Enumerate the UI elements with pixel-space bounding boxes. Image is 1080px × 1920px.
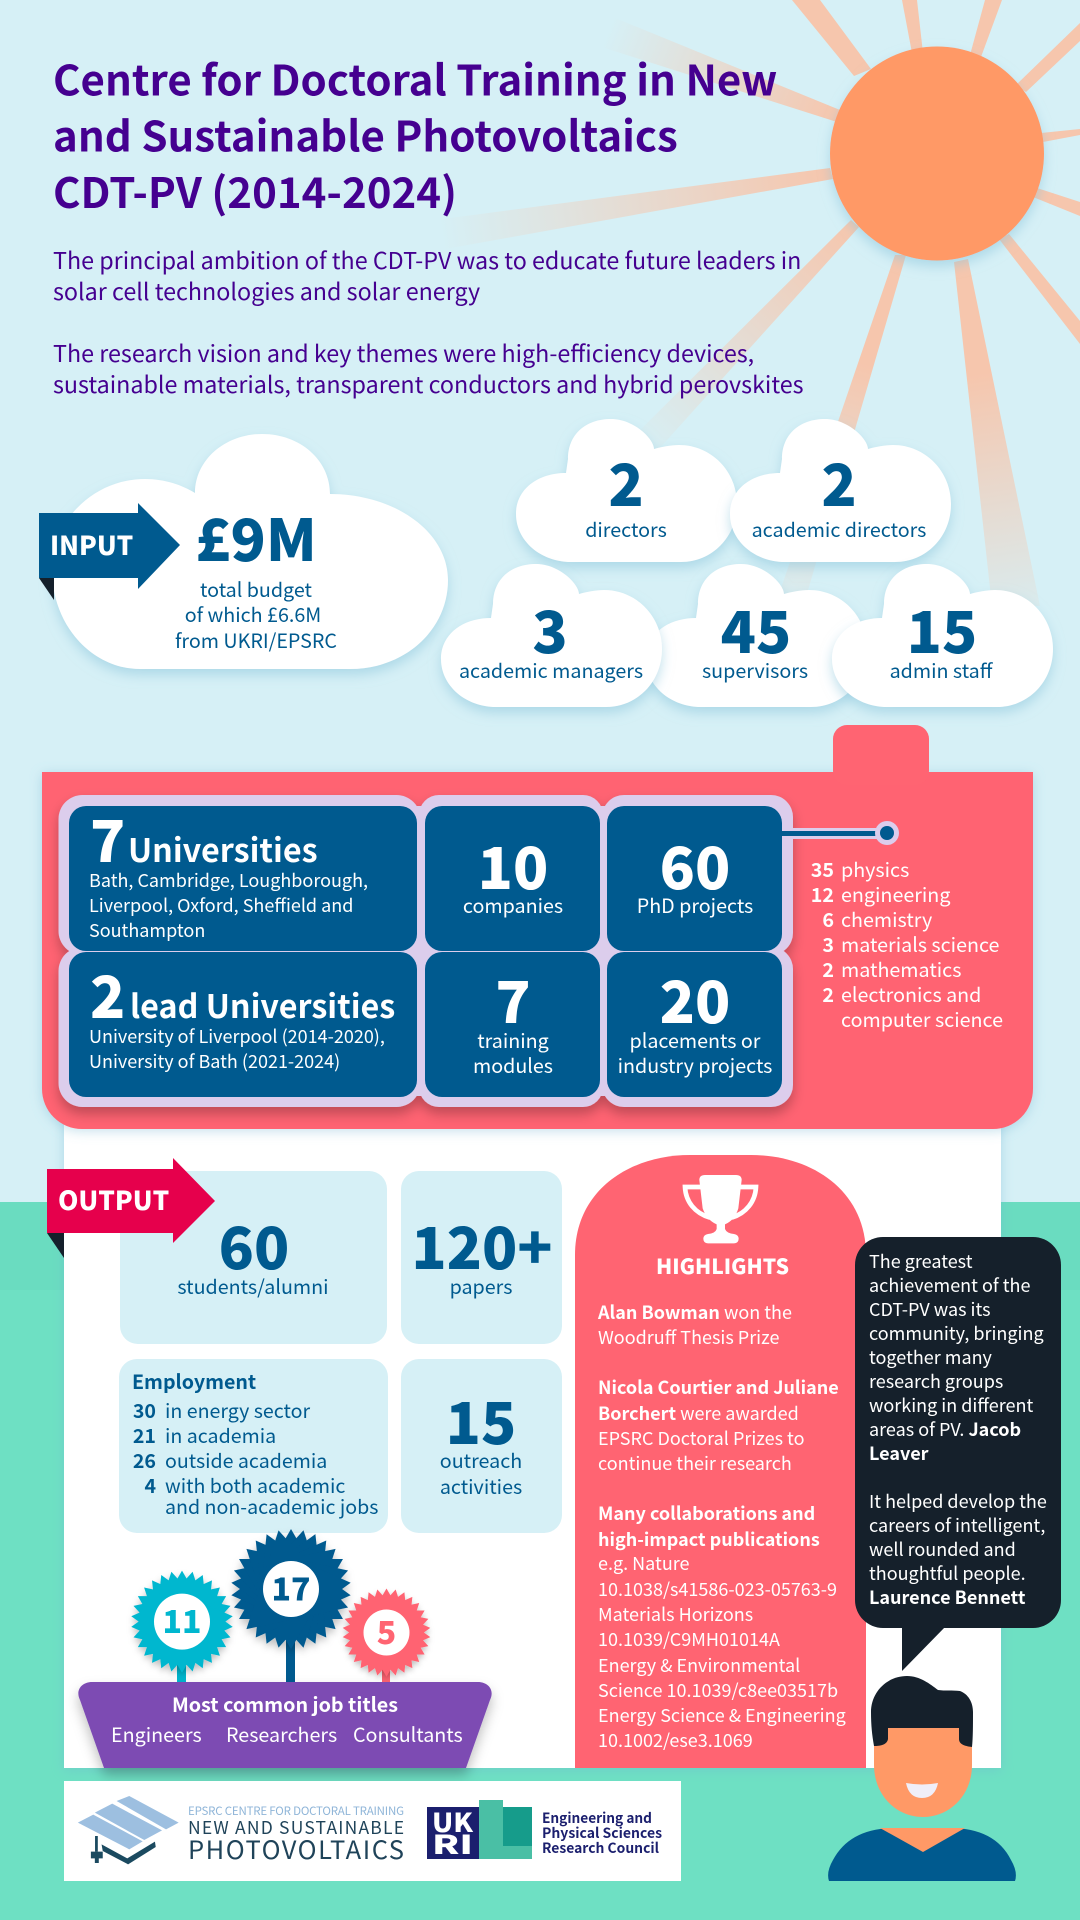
flower pot: job titles: Engineers (111, 1719, 202, 1748)
logo text: CDT-PV: PHOTOVOLTAICS (188, 1830, 404, 1867)
PhD subject list: 12 (811, 879, 834, 908)
panel: programme (42, 725, 1033, 1129)
panel: highlights: Materials Horizons (598, 1601, 753, 1627)
flower: 17 (231, 1510, 370, 1657)
speech bubble: achievement of the (869, 1272, 1030, 1298)
speech bubble: It helped develop the (869, 1488, 1047, 1514)
PhD subject list: 2 (822, 954, 834, 983)
logo panel (64, 1781, 681, 1881)
flower: 11: 11 (163, 1597, 201, 1643)
background sky (0, 0, 1080, 1202)
speech bubble (855, 1237, 1061, 1671)
cloud: academic directors (730, 419, 951, 562)
logo: UKRI (427, 1800, 532, 1862)
speech bubble: CDT-PV was its (869, 1296, 991, 1322)
speech bubble: The greatest (869, 1248, 973, 1274)
cloud: academic managers: 3 (532, 586, 568, 670)
panel: highlights: 10.1039/C9MH01014A (598, 1626, 780, 1652)
sun rays (420, 0, 1080, 606)
flower pot: job titles: Consultants (353, 1719, 463, 1748)
tile grid: 60 (660, 822, 730, 906)
tile grid: 2 (90, 951, 125, 1035)
logo text: CDT-PV (188, 1803, 404, 1867)
box: papers (401, 1171, 562, 1344)
panel: highlights: 10.1038/s41586-023-05763-9 (598, 1576, 837, 1602)
box: employment (119, 1359, 388, 1533)
cloud: admin staff: 15 (907, 586, 977, 670)
PhD subject list: physics (841, 854, 909, 883)
panel: highlights: continue their research (598, 1450, 792, 1476)
background grass (0, 1202, 1080, 1920)
tile grid: companies (463, 890, 563, 919)
input arrow (39, 503, 180, 600)
panel: highlights: Nicola Courtier and Juliane (598, 1374, 839, 1400)
panel: highlights: e.g. Nature (598, 1550, 690, 1576)
speech bubble: careers of intelligent, (869, 1512, 1045, 1538)
flower pot: job titles: Most common job titles (172, 1689, 398, 1718)
tile grid: industry projects (618, 1050, 772, 1079)
icon: trophy (685, 1175, 756, 1243)
title: and Sustainable Photovoltaics (53, 104, 678, 165)
logo text: EPSRC: Physical Sciences (542, 1823, 662, 1843)
flower: 17: 17 (272, 1564, 310, 1610)
panel: highlights: Energy Science & Engineering (598, 1702, 846, 1728)
cloud: supervisors: 45 (721, 586, 791, 670)
tile grid: University of Bath (2021-2024) (89, 1048, 340, 1074)
speech bubble: Leaver (869, 1440, 929, 1466)
title (53, 48, 777, 221)
cloud: budget: £9M (195, 494, 317, 578)
tile grid: training (477, 1025, 549, 1054)
tile grid: Bath, Cambridge, Loughborough, (89, 867, 368, 893)
box: employment: 21 (133, 1420, 156, 1449)
output panel (64, 1100, 1001, 1768)
cloud: admin staff (832, 564, 1053, 707)
logo text: EPSRC: Engineering and (542, 1808, 652, 1828)
tile grid: PhD projects (637, 890, 753, 919)
panel: highlights: EPSRC Doctoral Prizes to (598, 1425, 804, 1451)
tile grid (58, 795, 793, 1107)
cloud: academic directors: 2 (821, 439, 857, 523)
box: employment: with both academic (165, 1470, 345, 1499)
cloud: budget (52, 434, 448, 669)
PhD subject list: 3 (822, 929, 834, 958)
logo: UKRI: UK (432, 1803, 474, 1840)
input arrow: INPUT (50, 526, 133, 563)
box: employment: 4 (144, 1470, 156, 1499)
title: Centre for Doctoral Training in New (53, 48, 777, 109)
sun (830, 46, 1044, 260)
box: outreach (401, 1359, 562, 1533)
speech bubble: working in different (869, 1392, 1033, 1418)
tile grid: Southampton (89, 917, 205, 943)
panel: highlights: Woodruff Thesis Prize (598, 1324, 779, 1350)
tile grid: Universities (128, 826, 318, 872)
box: employment: and non-academic jobs (165, 1491, 378, 1520)
intro text: The principal ambition of the CDT-PV was to educate future leaders in (53, 242, 801, 276)
panel: highlights: 10.1002/ese3.1069 (598, 1727, 753, 1753)
box: employment: 30 (133, 1395, 156, 1424)
cloud: supervisors (646, 564, 867, 707)
speech bubble: Laurence Bennett (869, 1584, 1026, 1610)
intro text (53, 242, 804, 400)
tile grid: Liverpool, Oxford, Sheffield and (89, 892, 353, 918)
panel: highlights: Energy & Environmental (598, 1652, 800, 1678)
logo text: EPSRC: Research Council (542, 1838, 660, 1858)
logo: solar graduation cap (78, 1796, 179, 1864)
cloud: admin staff: admin staff (890, 655, 994, 684)
cloud: budget: of which £6.6M (185, 599, 321, 628)
flower: 5: 5 (377, 1608, 396, 1654)
title: CDT-PV (2014-2024) (53, 160, 457, 221)
tile grid: 10 (478, 822, 548, 906)
tile grid: 7 (90, 795, 125, 879)
PhD subject list: mathematics (841, 954, 961, 983)
flower: 5 (343, 1575, 445, 1682)
logo text: CDT-PV: NEW AND SUSTAINABLE (188, 1815, 404, 1840)
speech bubble: community, bringing (869, 1320, 1044, 1346)
person illustration (828, 1676, 1016, 1881)
box: students: students/alumni (177, 1271, 329, 1300)
panel: highlights: Many collaborations and (598, 1500, 815, 1526)
box: students (120, 1171, 387, 1344)
logo: UKRI: RI (432, 1825, 473, 1862)
box: outreach: 15 (446, 1377, 516, 1461)
flower pot: job titles (78, 1682, 492, 1768)
cloud: academic managers: academic managers (459, 655, 643, 684)
PhD subject list: 2 (822, 979, 834, 1008)
panel: highlights: HIGHLIGHTS (656, 1251, 789, 1281)
cloud: directors (516, 419, 737, 562)
PhD subject list (811, 854, 1003, 1033)
box: employment: Employment (132, 1366, 256, 1395)
box: employment: in academia (165, 1420, 276, 1449)
box: students: 60 (219, 1202, 289, 1286)
panel: highlights (575, 1155, 866, 1768)
panel: highlights: Borchert were awarded (598, 1400, 799, 1426)
tile grid: lead Universities (130, 982, 395, 1028)
cloud: directors: 2 (608, 439, 644, 523)
PhD subject list: electronics and (841, 979, 981, 1008)
logo text: EPSRC (542, 1808, 662, 1858)
intro text: The research vision and key themes were high-efficiency devices, (53, 335, 754, 369)
box: employment: outside academia (165, 1445, 327, 1474)
panel: highlights: Science 10.1039/c8ee03517b (598, 1677, 838, 1703)
panel: highlights: Alan Bowman won the (597, 1299, 792, 1325)
box: outreach: activities (440, 1471, 522, 1500)
intro text: solar cell technologies and solar energy (53, 273, 480, 307)
speech bubble: research groups (869, 1368, 1003, 1394)
speech bubble: together many (869, 1344, 993, 1370)
box: outreach: outreach (440, 1445, 522, 1474)
box: papers: 120+ (411, 1202, 553, 1286)
speech bubble: well rounded and (869, 1536, 1016, 1562)
PhD subject list: 6 (822, 904, 834, 933)
output arrow (47, 1158, 215, 1258)
flower pot: job titles: Researchers (226, 1719, 337, 1748)
tile grid: 20 (660, 956, 730, 1040)
PhD subject list: computer science (841, 1004, 1003, 1033)
cloud: supervisors: supervisors (702, 655, 808, 684)
box: papers: papers (450, 1271, 512, 1300)
tile grid: placements or (630, 1025, 761, 1054)
logo text: CDT-PV: EPSRC CENTRE FOR DOCTORAL TRAINING (188, 1803, 404, 1819)
speech bubble: areas of PV. Jacob (869, 1416, 1021, 1442)
cloud: academic directors: academic directors (752, 514, 926, 543)
PhD subject list: 35 (811, 854, 834, 883)
flower: 11 (131, 1554, 249, 1679)
flower stems (177, 1620, 390, 1684)
tile grid: University of Liverpool (2014-2020), (89, 1023, 385, 1049)
PhD subject list: materials science (841, 929, 1000, 958)
cloud: directors: directors (585, 514, 667, 543)
box: employment: 26 (133, 1445, 156, 1474)
PhD subject list: engineering (841, 879, 950, 908)
panel: highlights: high-impact publications (598, 1526, 820, 1552)
cloud: budget: from UKRI/EPSRC (175, 625, 337, 654)
tile grid: 7 (495, 956, 531, 1040)
speech bubble: thoughtful people. (869, 1560, 1026, 1586)
cloud: budget: total budget (200, 574, 313, 603)
box: employment: in energy sector (165, 1395, 311, 1424)
tile grid: modules (473, 1050, 553, 1079)
intro text: sustainable materials, transparent conductors and hybrid perovskites (53, 366, 804, 400)
output arrow: OUTPUT (58, 1181, 169, 1218)
PhD subject list: chemistry (841, 904, 932, 933)
connector (782, 821, 899, 845)
cloud: academic managers (441, 564, 662, 707)
